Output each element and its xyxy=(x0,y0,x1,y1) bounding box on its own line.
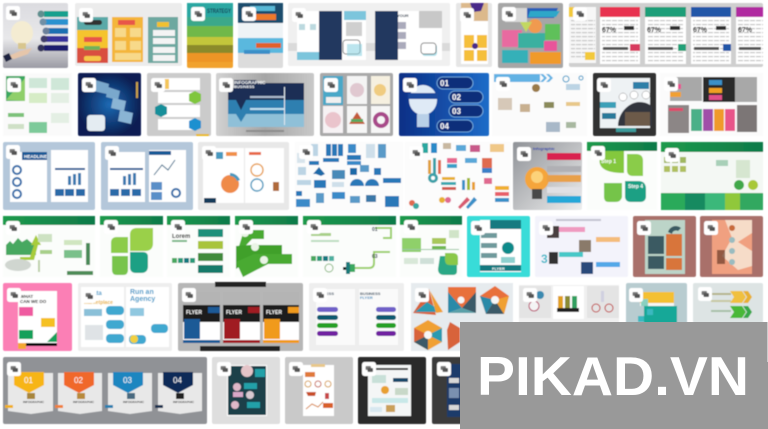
thumbnail: business flyer xyxy=(238,3,283,68)
thumbnail: dark blue slides xyxy=(78,73,141,136)
thumbnail: four numbered envelope cards: INFOGRAPHIC xyxy=(173,400,195,404)
thumbnail: four numbered envelope cards: 02 xyxy=(74,376,83,385)
thumbnail: green lorem banners: Lorem xyxy=(172,234,190,240)
thumbnail: polygon pie diagrams xyxy=(411,283,513,351)
thumbnail: marketplace spread: Agency xyxy=(130,296,155,303)
thumbnail: green report grid xyxy=(3,73,72,136)
thumbnail: brand manual pages xyxy=(569,3,763,67)
thumbnail: green leaf steps: Step 1 xyxy=(601,159,616,165)
thumbnail: infographic business table: BUSINESS xyxy=(234,84,255,89)
thumbnail: business flyer pills: FLYER xyxy=(360,295,373,300)
thumbnail: teal flyer: FLYER xyxy=(492,266,505,271)
thumbnail: green mixed report xyxy=(400,216,462,277)
thumbnail: yellow purple poster xyxy=(456,3,492,67)
thumbnail: blue headline report: HEADLINE xyxy=(24,154,47,159)
thumbnail: blue chevron report xyxy=(492,73,587,136)
thumbnail: three flyers: FLYER xyxy=(186,310,202,316)
thumbnail: chevron list xyxy=(693,283,763,323)
thumbnail: rose flyer with panels xyxy=(633,216,696,277)
thumbnail: green plug xyxy=(303,216,396,277)
thumbnail: blue icon collection xyxy=(295,142,403,210)
thumbnail: diagram tiles xyxy=(519,285,619,329)
thumbnail: pink flyer xyxy=(3,283,72,351)
thumbnail: green leaf steps xyxy=(587,142,657,210)
thumbnail: brand manual pages: 67% xyxy=(647,27,662,34)
thumbnail: orange bulb with list xyxy=(513,142,582,210)
thumbnail: pink flyer: WHAT xyxy=(20,294,33,299)
thumbnail: marketplace spread xyxy=(78,283,172,351)
thumbnail: blue chart report xyxy=(101,142,193,210)
thumbnail: green leaf steps: Step 4 xyxy=(628,184,643,190)
watermark panel xyxy=(460,322,768,429)
thumbnail: business flyer pills: BUSINESS xyxy=(360,291,381,296)
thumbnail: navy white brochure spreads: YOUR xyxy=(397,13,409,18)
thumbnail: blue infographic bulb: 01 xyxy=(440,79,449,88)
thumbnail: blue infographic bulb: 02 xyxy=(452,93,461,102)
thumbnail: four numbered envelope cards: INFOGRAPHIC xyxy=(123,400,145,404)
thumbnail: orange bulb with list: Infographic xyxy=(533,146,556,151)
thumbnail: infographic business table xyxy=(216,73,314,136)
thumbnail: yellow and teal cards xyxy=(626,283,687,351)
thumbnail: infographic business table: INFOGRAPHIC xyxy=(234,80,266,85)
thumbnail: marketplace spread: Run an xyxy=(130,289,154,296)
thumbnail: brand manual pages: 67% xyxy=(602,27,617,34)
thumbnail: marketplace spread: Marketplace xyxy=(84,300,113,306)
thumbnail: business flyer pills xyxy=(309,283,404,351)
thumbnail: green lorem banners xyxy=(167,216,230,277)
thumbnail: light bulb with bars xyxy=(3,3,68,68)
thumbnail: green report with step bar xyxy=(661,142,763,210)
thumbnail: teal flyer xyxy=(467,216,530,277)
thumbnail: lavender step list: 3 xyxy=(541,252,548,266)
thumbnail: dark city flyer xyxy=(593,73,656,136)
thumbnail: dark poster white xyxy=(358,357,426,424)
thumbnail: marketplace spread: ata xyxy=(93,291,102,297)
thumbnail: green eco infographic xyxy=(3,216,95,277)
thumbnail: circular diagrams sheet xyxy=(320,73,393,136)
thumbnail: brand manual pages: 67% xyxy=(693,27,708,34)
thumbnail: teal portrait flyer xyxy=(212,357,280,424)
thumbnail: three flyers xyxy=(178,282,303,351)
watermark logo text: PIKAD.VN xyxy=(477,345,749,407)
thumbnail: people and rings brochure xyxy=(198,142,289,210)
thumbnail: colourful chart collection xyxy=(405,142,511,210)
thumbnail: four numbered envelope cards: INFOGRAPHIC xyxy=(23,400,45,404)
thumbnail: business flyer pills: INESS xyxy=(322,291,334,296)
thumbnail: four numbered envelope cards xyxy=(3,357,207,424)
thumbnail: four numbered envelope cards: 01 xyxy=(24,376,33,385)
thumbnail: strategy bands xyxy=(187,3,233,68)
thumbnail: four numbered envelope cards: INFOGRAPHIC xyxy=(73,400,95,404)
thumbnail: colour tab set xyxy=(660,73,763,136)
thumbnail: blue infographic bulb xyxy=(399,73,489,136)
thumbnail: strategy bands: STRATEGY xyxy=(207,9,231,15)
thumbnail: four numbered envelope cards: 03 xyxy=(123,376,132,385)
thumbnail: navy white brochure spreads xyxy=(288,3,450,66)
thumbnail: rose flyer orange xyxy=(700,216,763,277)
thumbnail: colourful stickers xyxy=(498,3,563,68)
thumbnail: dark poster navy xyxy=(432,357,462,424)
thumbnail: blue headline report xyxy=(3,142,95,210)
thumbnail: pink flyer: CAN WE DO xyxy=(20,299,47,304)
thumbnail: green steps staircase xyxy=(235,216,298,277)
thumbnail: four numbered envelope cards: 04 xyxy=(173,376,182,385)
thumbnail: three coloured panels xyxy=(75,3,182,66)
thumbnail: three flyers: FLYER xyxy=(266,310,282,316)
thumbnail: green plug: 01 xyxy=(372,227,378,233)
thumbnail: brand manual pages: 67% xyxy=(738,27,753,34)
thumbnail: blue infographic bulb: 04 xyxy=(440,122,449,131)
thumbnail: green plug: 03 xyxy=(372,254,378,260)
thumbnail: green four leaves xyxy=(100,216,163,277)
thumbnail: hexagon list xyxy=(147,73,211,136)
thumbnail: lavender step list xyxy=(535,216,628,277)
thumbnail: orange white poster xyxy=(285,357,353,424)
thumbnail: three flyers: FLYER xyxy=(226,310,242,316)
thumbnail: blue infographic bulb: 03 xyxy=(452,107,461,116)
